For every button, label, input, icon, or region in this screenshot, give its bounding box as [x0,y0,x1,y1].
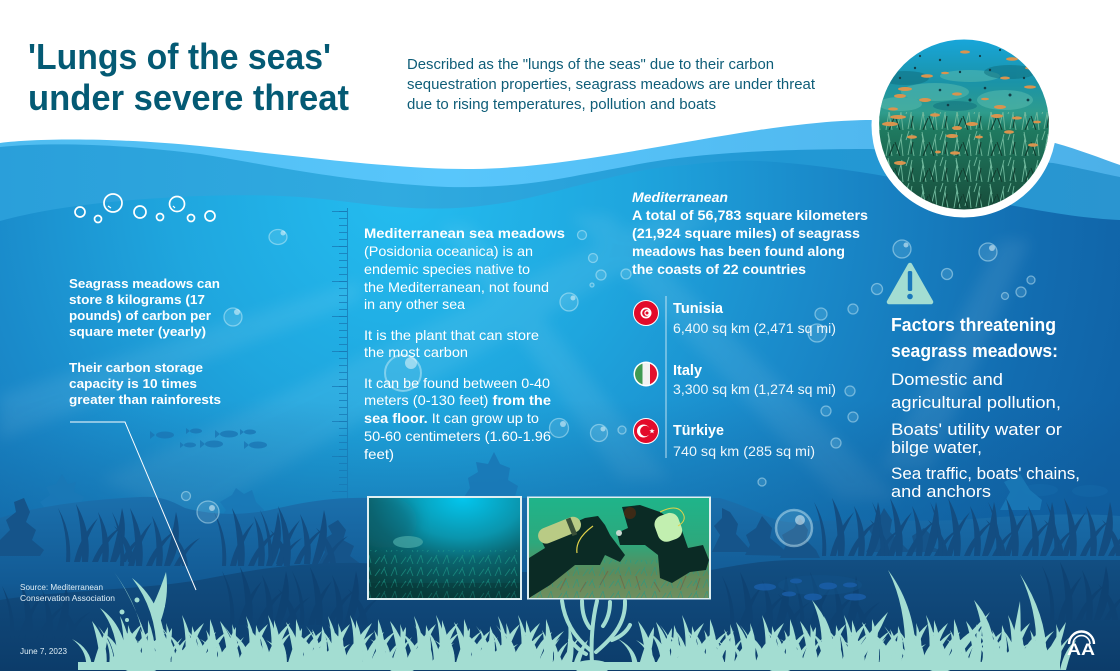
icon: warning triangle [889,265,931,302]
intro text: Described as the "lungs of the seas" due to their carbon [407,56,774,73]
left text block: carbon storage: pounds) of carbon per [69,308,211,323]
right text block: Mediterranean total: the coasts of 22 countries [632,261,806,277]
floating bubbles [182,230,1035,546]
photo: divers [527,496,711,600]
decorative bubble row icon [75,194,215,222]
right text block: Mediterranean total: (21,924 square miles) of seagrass [632,225,860,241]
right text block: Mediterranean total: meadows has been found along [632,243,845,259]
threats text block [891,315,1080,501]
middle text block: Mediterranean sea meadows: (Posidonia oceanica) is an [364,243,533,259]
circular photo: seagrass and fish [872,32,1056,218]
middle text block: Mediterranean sea meadows: the most carbon [364,344,468,360]
title [28,36,349,118]
country figures: Türkiye [673,423,724,439]
middle text block: Mediterranean sea meadows: meters (0-130 feet) from the [364,392,551,408]
foreground coral details [120,598,630,664]
threats text block: Boats' utility water or [891,420,1062,439]
middle text block: Mediterranean sea meadows: in any other sea [364,296,465,312]
middle text block: Mediterranean sea meadows: feet) [364,446,394,462]
right text block: Mediterranean total: Mediterranean [632,189,728,205]
intro text: sequestration properties, seagrass meadows are under threat [407,76,816,93]
intro text: due to rising temperatures, pollution and boats [407,96,716,113]
logo: AA: AA [1067,640,1095,659]
middle text block: Mediterranean sea meadows: It is the plant that can store [364,327,539,343]
country figures [673,301,836,459]
threats text block: and anchors [891,482,991,501]
country figures: 740 sq km (285 sq mi) [673,444,815,459]
middle text block: Mediterranean sea meadows: sea floor. It can grow up to [364,410,539,426]
middle text block: Mediterranean sea meadows: Mediterranean sea meadows [364,225,565,241]
title: under severe threat [28,77,349,118]
middle text block: Mediterranean sea meadows: 50-60 centimeters (1.60-1.96 [364,428,551,444]
left text block: carbon storage: store 8 kilograms (17 [69,292,205,307]
middle text block: Mediterranean sea meadows [364,225,565,462]
middle text block: Mediterranean sea meadows: the Mediterranean, not found [364,279,549,295]
middle text block: Mediterranean sea meadows: It can be found between 0-40 [364,375,550,391]
threats text block: Factors threatening [891,315,1056,335]
flag: Tunisia [634,300,658,326]
foreground seagrass [72,570,1076,671]
left text block: carbon storage: capacity is 10 times [69,376,197,391]
logo: AA [1067,632,1095,659]
threats text block: agricultural pollution, [891,393,1061,412]
country figures: Italy [673,363,702,379]
date: June 7, 2023 [20,646,67,656]
callout line to seagrass [70,422,196,590]
intro text [407,56,816,113]
source note: Conservation Association [20,593,115,603]
right text block: Mediterranean total: A total of 56,783 square kilometers [632,207,868,223]
seabed silhouettes [0,452,1120,671]
right text block: Mediterranean total [632,189,868,277]
threats text block: bilge water, [891,438,982,457]
flag: Italy [634,362,658,386]
country figures: 6,400 sq km (2,471 sq mi) [673,321,836,336]
source note: Source: Mediterranean [20,582,103,592]
title: 'Lungs of the seas' [28,36,331,77]
flag: Türkiye [634,418,658,444]
fish schools [150,428,1108,497]
depth ruler [340,208,348,500]
threats text block: seagrass meadows: [891,341,1058,361]
middle text block: Mediterranean sea meadows: endemic species native to [364,261,530,277]
left text block: carbon storage: Seagrass meadows can [69,276,220,291]
source note [20,582,115,603]
threats text block: Domestic and [891,370,1003,389]
left text block: carbon storage: Their carbon storage [69,360,203,375]
country figures: 3,300 sq km (1,274 sq mi) [673,382,836,397]
threats text block: Sea traffic, boats' chains, [891,464,1080,483]
country list divider [665,296,667,458]
country figures: Tunisia [673,301,724,317]
left text block: carbon storage [69,276,221,407]
left text block: carbon storage: square meter (yearly) [69,324,206,339]
left text block: carbon storage: greater than rainforests [69,392,221,407]
photo: underwater seagrass meadow [353,496,522,600]
